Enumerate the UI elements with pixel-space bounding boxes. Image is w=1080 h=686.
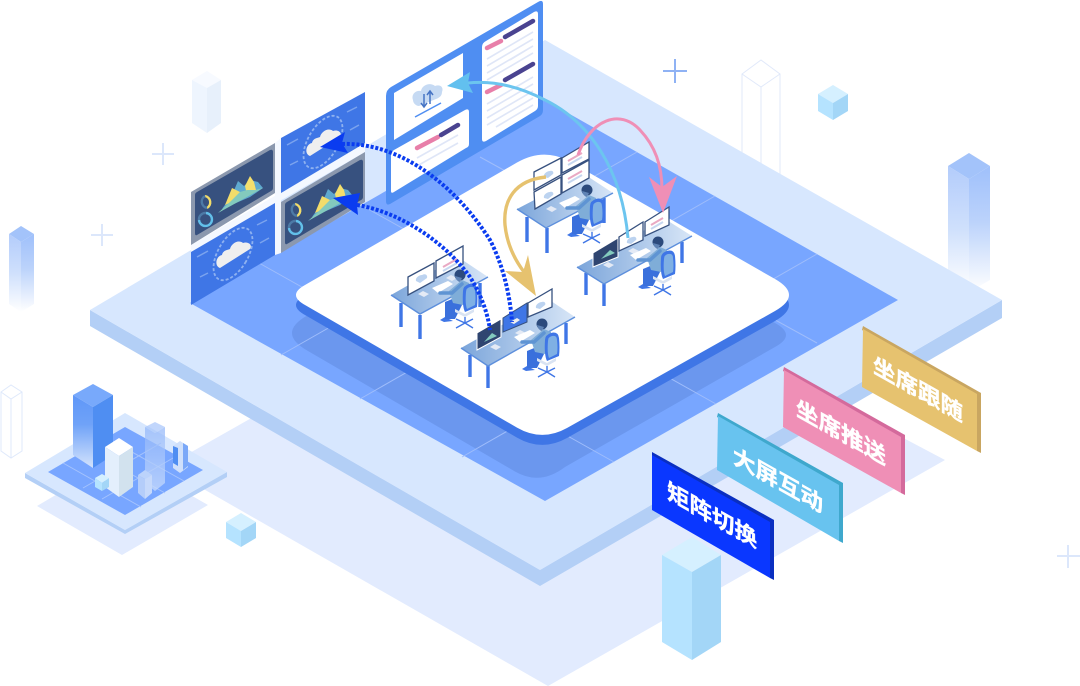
white tower xyxy=(105,438,133,497)
lower text card xyxy=(391,109,469,193)
shadow of white platform xyxy=(292,200,786,478)
arrow: matrix switch upper dotted xyxy=(320,132,512,322)
small cyan cube xyxy=(95,474,109,491)
right text card xyxy=(482,11,538,142)
wall frame xyxy=(386,1,543,205)
fading tower left xyxy=(9,226,34,312)
label tag: matrix switch xyxy=(652,452,774,580)
blue floor plate xyxy=(190,100,898,501)
platform side xyxy=(296,165,789,445)
screen: dark bottom right xyxy=(281,152,365,253)
wall gaps xyxy=(191,138,365,255)
desk top with operator xyxy=(517,142,613,253)
glass tower xyxy=(145,422,165,491)
floor grid lines xyxy=(259,152,817,462)
arrow: seat push pink xyxy=(578,119,677,213)
cloud transfer card xyxy=(394,53,463,140)
label tag: screen interaction: 大屏互动 xyxy=(733,443,823,519)
city shadow plate xyxy=(37,456,208,555)
outline cuboid top xyxy=(742,60,780,190)
screen: blue bottom left xyxy=(191,203,275,305)
pale cuboid top left xyxy=(192,71,221,133)
small glass tower xyxy=(138,470,152,499)
screen: dark top left xyxy=(191,143,275,245)
label tag: matrix switch: 矩阵切换 xyxy=(667,478,757,554)
desk left with operator xyxy=(391,246,488,339)
arrow: seat follow gold xyxy=(505,177,546,296)
desk bottom with operator xyxy=(461,289,575,388)
main plate top xyxy=(90,40,1002,570)
screen: blue top right xyxy=(281,92,365,193)
label tag: seat push xyxy=(783,367,905,495)
left video wall xyxy=(191,92,365,305)
city plate xyxy=(25,472,227,534)
label tag: seat follow xyxy=(862,326,981,453)
arrow: screen interaction light blue xyxy=(447,72,628,238)
white platform top xyxy=(296,155,789,435)
desk right with operator xyxy=(577,207,692,306)
right document wall xyxy=(386,1,543,205)
arch tower xyxy=(173,441,188,473)
fading tower right xyxy=(948,153,990,292)
cyan tower bottom xyxy=(662,537,721,660)
main plate side xyxy=(90,300,1002,586)
cyan cube bottom left xyxy=(226,513,256,547)
tall blue tower xyxy=(73,384,113,468)
label tag: screen interaction xyxy=(717,413,843,543)
background decoration: plus signs xyxy=(91,59,1080,568)
label tag: seat follow: 坐席跟随 xyxy=(873,352,963,428)
small city illustration xyxy=(25,384,227,555)
bottom pale plate xyxy=(165,250,945,686)
small cube top right xyxy=(818,85,848,120)
outline cuboid left xyxy=(1,385,22,458)
label tag: seat push: 坐席推送 xyxy=(796,395,886,471)
arrow: matrix switch lower dotted xyxy=(333,193,490,330)
